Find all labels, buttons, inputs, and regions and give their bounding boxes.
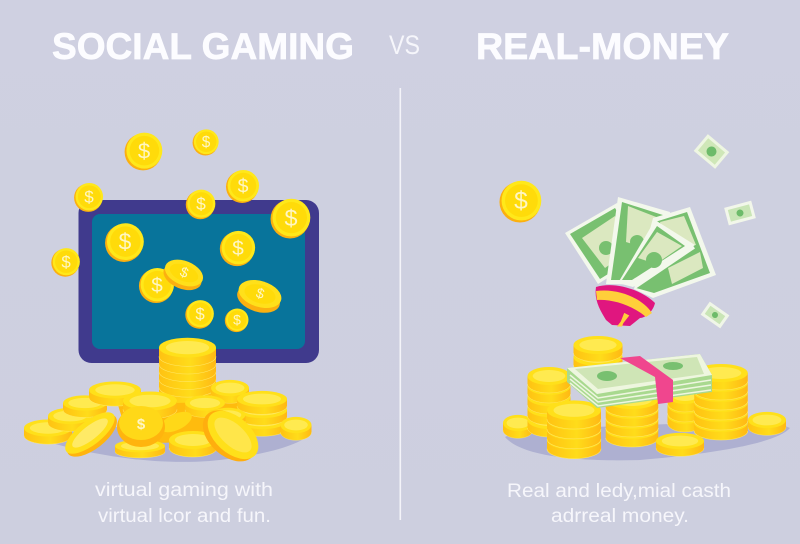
coin pile shadow [505, 420, 790, 460]
floating coins: $ [238, 175, 249, 197]
caption: social gaming [95, 480, 273, 527]
gold coin [499, 181, 541, 223]
coin pile [24, 380, 312, 472]
floating coins: $ [178, 263, 191, 281]
floating coins: $ [233, 312, 241, 328]
panel: real-money illustration [499, 134, 790, 460]
vs label: VS [389, 30, 420, 60]
floating coins: $ [61, 253, 71, 272]
gold coin: $ [514, 188, 528, 215]
floating coins: $ [138, 138, 150, 163]
small bill middle [724, 201, 756, 225]
banknote bundle [567, 354, 712, 408]
caption: real-money: Real and ledy,mial casth [507, 481, 731, 502]
front dollar coin [117, 406, 165, 447]
floating coins: $ [195, 305, 205, 324]
floating coins [51, 129, 310, 332]
floating coins: $ [119, 229, 132, 255]
caption: real-money: adrreal money. [551, 506, 689, 527]
coin stacks [503, 336, 786, 459]
fanned banknotes [565, 197, 716, 298]
tilted coin right [193, 400, 267, 472]
caption: social gaming: virtual gaming with [95, 480, 273, 501]
floating coins: $ [151, 274, 163, 297]
small bill top [694, 134, 729, 169]
pink paper band [620, 356, 673, 404]
central coin stack [159, 338, 216, 412]
title: social gaming: SOCIAL GAMING [52, 25, 354, 67]
floating coins: $ [284, 205, 298, 231]
floating coins: $ [196, 194, 206, 214]
pink funnel holder [596, 285, 655, 326]
divider line [400, 88, 401, 520]
front dollar coin: $ [137, 416, 146, 433]
panel: social gaming illustration [24, 129, 319, 472]
caption: real-money [507, 481, 731, 527]
small bill bottom [701, 302, 729, 328]
caption: social gaming: virtual lcor and fun. [98, 506, 271, 527]
floating coins: $ [84, 188, 94, 207]
monitor [78, 200, 319, 363]
coin pile shadow [25, 425, 311, 462]
tilted coin left [59, 405, 124, 464]
title: real-money: REAL-MONEY [476, 25, 729, 67]
floating coins: $ [202, 134, 211, 151]
floating coins: $ [232, 237, 244, 260]
floating coins: $ [254, 284, 267, 302]
